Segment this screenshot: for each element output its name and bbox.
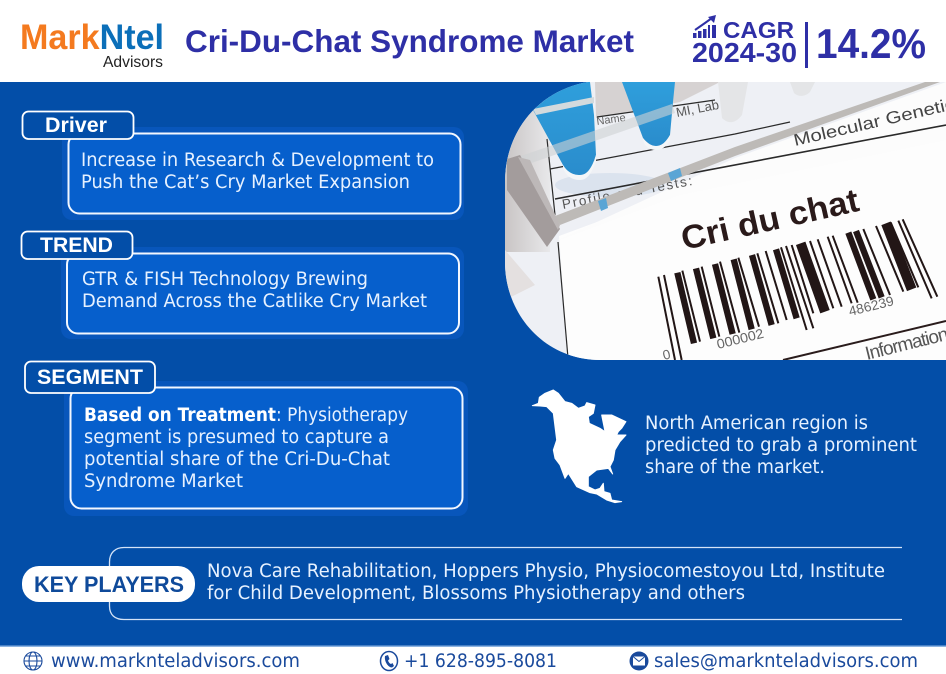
barcode — [658, 219, 937, 360]
key players text: Nova Care Rehabilitation, Hoppers Physio, Physiocomestoyou Ltd, Institute — [207, 561, 885, 582]
segment tag — [25, 362, 155, 393]
photo labels: 000002 — [715, 326, 765, 352]
icon: north america map — [532, 390, 626, 503]
rack — [505, 250, 535, 297]
icon: mail — [630, 652, 648, 670]
segment text: Based on Treatment: Physiotherapy — [84, 405, 420, 426]
driver text: Push the Cat’s Cry Market Expansion — [81, 172, 410, 193]
molecular genetics label: Molecular Genetic — [792, 94, 946, 150]
header logo: Advisors — [103, 54, 163, 71]
region text: North American region is — [645, 413, 868, 434]
photo: cri du chat test sheet — [505, 82, 946, 365]
region text: predicted to grab a prominent — [645, 435, 917, 456]
key players text: for Child Development, Blossoms Physiotherapy and others — [207, 583, 745, 604]
key players pill: KEY PLAYERS — [34, 572, 184, 597]
trend tag — [22, 232, 132, 259]
segment tag: SEGMENT — [37, 365, 143, 389]
paper — [559, 125, 946, 360]
trend tag: TREND — [40, 233, 113, 257]
CAGR label: CAGR — [723, 17, 794, 43]
trend text: Demand Across the Catlike Cry Market — [82, 291, 427, 312]
photo labels: 0 — [661, 347, 672, 363]
profile and tests label: Profile and Tests: — [561, 173, 693, 212]
test tubes — [533, 82, 596, 176]
form labels: MI, Lab — [675, 97, 720, 120]
panel: trend — [22, 232, 464, 339]
form labels: Name — [596, 112, 626, 128]
icon: globe — [24, 652, 42, 670]
phone number: +1 628-895-8081 — [404, 651, 557, 672]
email: sales@marknteladvisors.com — [654, 651, 918, 672]
photo labels — [663, 296, 946, 360]
CAGR years: 2024-30 — [692, 37, 797, 68]
form lines — [547, 100, 790, 215]
segment text: potential share of the Cri-Du-Chat — [84, 449, 390, 470]
form labels — [596, 100, 718, 125]
driver tag — [22, 112, 134, 139]
driver text: Increase in Research & Development to — [81, 150, 434, 171]
photo heading: Cri du chat — [677, 181, 862, 257]
icon: phone — [380, 652, 398, 670]
website: www.marknteladvisors.com — [51, 651, 300, 672]
paper vertical edge — [558, 242, 568, 358]
header logo: MarkNtel — [20, 18, 164, 57]
CAGR value: 14.2% — [816, 20, 926, 67]
key players pill — [22, 566, 195, 602]
driver tag: Driver — [45, 113, 108, 137]
panel: driver — [22, 112, 464, 220]
segment text: segment is presumed to capture a — [84, 427, 389, 448]
segment text: Syndrome Market — [84, 471, 243, 492]
glass slide — [555, 82, 940, 225]
icon: growth chart — [693, 15, 716, 38]
title: Cri-Du-Chat Syndrome Market — [185, 23, 634, 59]
panel: segment — [25, 362, 468, 516]
trend text: GTR & FISH Technology Brewing — [82, 269, 368, 290]
footer — [0, 646, 946, 674]
region text: share of the market. — [645, 457, 825, 478]
panel: key players — [22, 548, 902, 620]
photo labels: 486239 — [847, 293, 895, 319]
CAGR block — [692, 15, 926, 68]
translucent slide — [532, 104, 675, 162]
